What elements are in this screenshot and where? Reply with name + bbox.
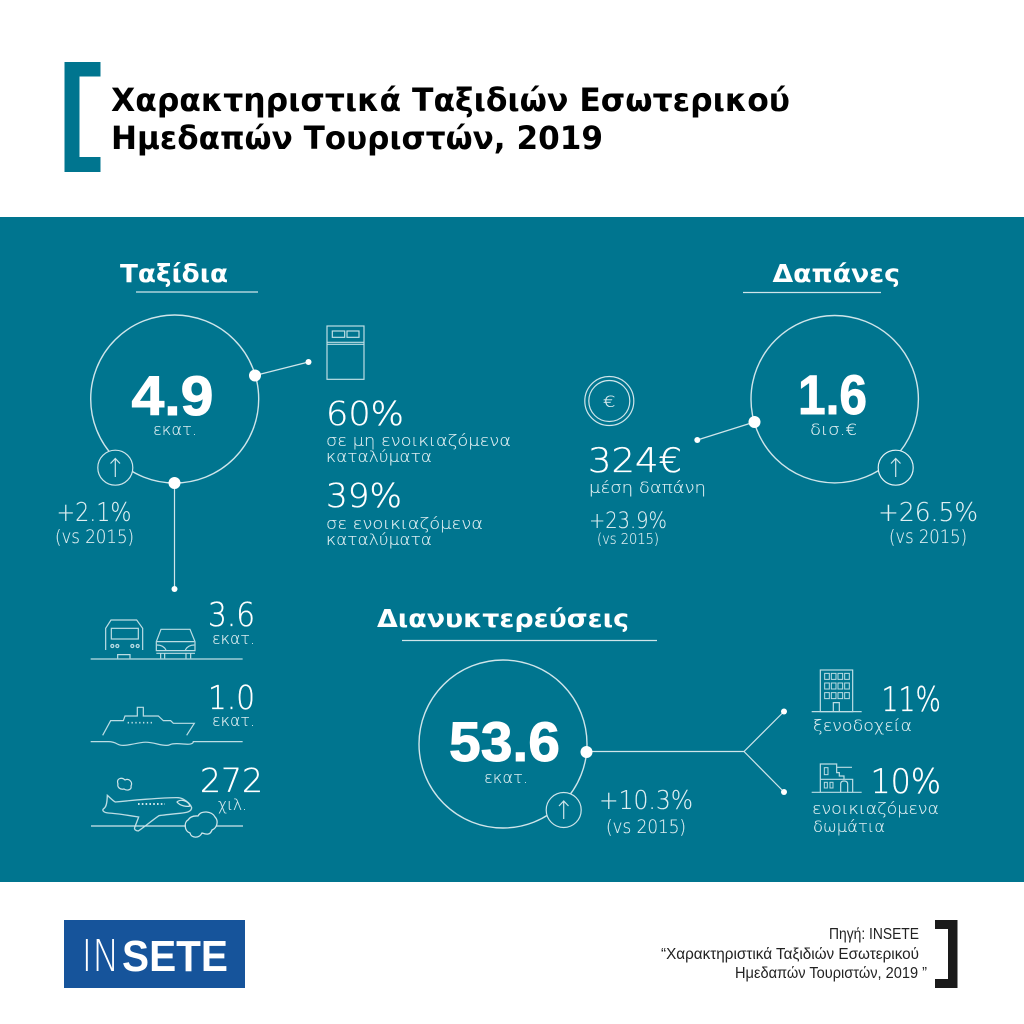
circle: 4.9 million trips: [91, 315, 259, 483]
stat: non-rented accommodation: καταλύματα: [326, 447, 432, 466]
change: overnight stays: (vs 2015): [606, 816, 686, 838]
change: spending: (vs 2015): [889, 526, 967, 548]
stat: rented rooms: [812, 762, 941, 836]
transport: plane: χιλ.: [218, 795, 247, 814]
connector: to accommodation types: [580, 708, 787, 795]
stat: hotels: [812, 670, 941, 735]
change: average spending: [589, 509, 667, 548]
connector: to transport: [168, 477, 180, 592]
icon: house: [812, 764, 862, 792]
section: overnight stays: [377, 604, 941, 838]
transport: plane: 272: [200, 761, 263, 800]
transport: road: 3.6: [208, 595, 255, 634]
title: Ημεδαπών Τουριστών, 2019: [111, 119, 603, 157]
source bracket: [935, 920, 958, 988]
change: average spending: +23.9%: [589, 509, 667, 534]
stat: non-rented accommodation: [326, 394, 511, 466]
main teal panel: [0, 217, 1024, 882]
transport: ship: 1.0: [208, 678, 255, 717]
circle: 1.6 billion euros: [751, 316, 918, 483]
transport: ship: εκατ.: [212, 711, 255, 730]
stat: rented accommodation: καταλύματα: [326, 530, 432, 549]
circle: 53.6 million nights: 53.6: [449, 710, 560, 773]
icon: ship: [91, 707, 243, 745]
title: [111, 81, 790, 157]
change: overnight stays: [599, 786, 693, 838]
stat: rented rooms: 10%: [870, 762, 941, 802]
icon: up arrow: [878, 450, 913, 485]
icon: euro coin: €: [603, 392, 616, 411]
transport: road: εκατ.: [212, 629, 255, 648]
logo: INSETE: [64, 920, 245, 988]
stat: rented rooms: ενοικιαζόμενα: [812, 799, 939, 818]
icon: hotel: [812, 670, 862, 712]
source note: Πηγή: INSETE: [829, 926, 919, 943]
heading: trips: [120, 259, 258, 292]
icon: euro coin: [585, 376, 634, 426]
stat: hotels: 11%: [882, 680, 941, 720]
connector: to accommodation: [249, 359, 312, 382]
stat: non-rented accommodation: 60%: [326, 394, 404, 433]
circle: 53.6 million nights: εκατ.: [484, 768, 528, 787]
icon: up arrow: [98, 450, 133, 485]
section: spending: [585, 259, 978, 548]
stat: average spending: μέση δαπάνη: [589, 478, 706, 497]
change: trips: +2.1%: [56, 498, 132, 528]
icon: plane with clouds: [91, 778, 243, 837]
heading: trips: Ταξίδια: [120, 259, 228, 288]
stat: hotels: ξενοδοχεία: [813, 716, 912, 735]
transport: plane: [91, 761, 263, 837]
stat: non-rented accommodation: σε μη ενοικιαζόμενα: [326, 431, 511, 450]
source note: “Χαρακτηριστικά Ταξιδιών Εσωτερικού: [661, 946, 919, 963]
circle: 4.9 million trips: 4.9: [132, 364, 214, 427]
transport: ship: [91, 678, 255, 745]
heading: spending: Δαπάνες: [772, 259, 900, 288]
change: spending: +26.5%: [878, 498, 978, 528]
stat: average spending: 324€: [588, 441, 682, 481]
icon: bus and car: [91, 620, 243, 659]
source note: [661, 926, 927, 982]
change: trips: [55, 498, 134, 548]
logo: INSETE: SETE: [122, 932, 228, 981]
stat: rented rooms: δωμάτια: [813, 817, 885, 836]
circle: 53.6 million nights: [419, 660, 587, 828]
heading: overnight stays: Διανυκτερεύσεις: [377, 604, 629, 633]
stat: rented accommodation: σε ενοικιαζόμενα: [326, 514, 483, 533]
change: average spending: (vs 2015): [597, 530, 659, 548]
logo: INSETE: IN: [82, 931, 120, 982]
stat: average spending: [588, 441, 706, 497]
stat: rented accommodation: [326, 476, 483, 549]
section: trips: [55, 259, 511, 837]
source note: Ημεδαπών Τουριστών, 2019 ”: [735, 965, 927, 982]
change: trips: (vs 2015): [55, 526, 134, 548]
stat: rented accommodation: 39%: [326, 476, 402, 515]
change: spending: [878, 498, 978, 548]
circle: 1.6 billion euros: δισ.€: [810, 420, 857, 439]
title bracket: [64, 62, 100, 172]
connector: to average spending: [694, 416, 760, 443]
change: overnight stays: +10.3%: [599, 786, 693, 816]
icon: up arrow: [546, 792, 581, 828]
title: Χαρακτηριστικά Ταξιδιών Εσωτερικού: [111, 81, 790, 119]
icon: bed: [327, 326, 364, 379]
transport: road: [91, 595, 255, 659]
circle: 4.9 million trips: εκατ.: [153, 420, 197, 439]
circle: 1.6 billion euros: 1.6: [798, 363, 867, 426]
